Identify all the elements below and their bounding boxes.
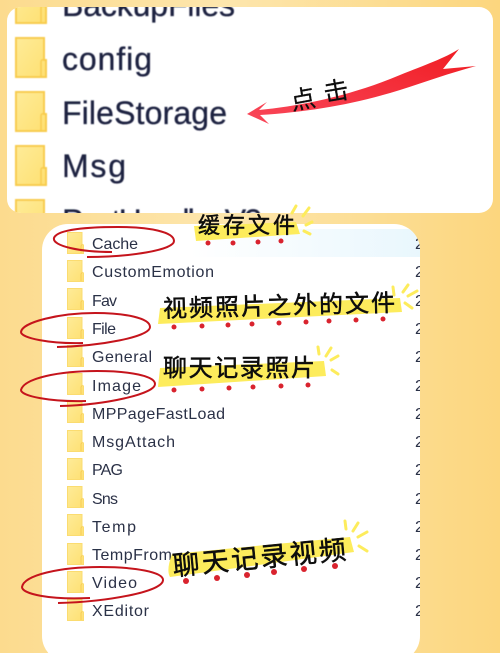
lower folder rows: MPPageFastLoad [92,406,225,423]
lower folder rows: 2 [415,349,424,366]
callout: cache files: 缓存文件 [198,208,295,240]
lower folder rows: 2 [415,434,424,451]
lower folder rows: 2 [415,491,424,508]
lower folder rows: PAG [92,462,123,479]
lower folder rows: 2 [415,547,424,564]
panel: top file list [7,7,493,213]
lower folder rows: XEditor [92,603,150,620]
lower folder rows: 2 [415,378,424,395]
lower folder rows: 2 [415,603,424,620]
lower folder rows: 2 [415,264,424,281]
lower folder rows: Image [92,378,141,395]
circle: Video [22,567,163,603]
lower folder rows: Cache [92,236,138,253]
lower folder rows: TempFrom [92,547,172,564]
callout: chat record videos: 聊天记录视频 [171,528,348,583]
callout: cache files [194,206,312,246]
lower folder rows: Sns [92,491,118,508]
lower folder rows: Fav [92,293,117,310]
panel: lower folder list [42,224,424,653]
label: click [287,70,351,118]
circle: Cache [54,227,174,257]
lower folder rows: General [92,349,152,366]
lower folder rows: 2 [415,321,424,338]
top folder rows: Msg [62,148,126,184]
top folder rows [14,7,261,213]
top folder rows: FileStorage [62,95,227,131]
lower folder rows: 2 [415,575,424,592]
lower folder rows: 2 [415,236,424,253]
top folder rows: PostHandler V3 [62,203,262,239]
lower folder rows: 2 [415,293,424,310]
lower folder rows: File [92,321,116,338]
arrow: pointing to FileStorage [247,49,476,124]
circle: Image [21,371,155,406]
lower folder rows: Temp [92,519,136,536]
label: click: 击 [320,70,351,110]
circle: File [21,313,150,347]
lower folder rows: 2 [415,462,424,479]
lower folder rows: 2 [415,519,424,536]
lower folder rows: CustomEmotion [92,264,214,281]
callout: files other than video and photos: 视频照片之外的文件 [163,283,395,324]
lower folder rows: Video [92,575,137,592]
top folder rows: config [62,41,152,77]
callout: chat record photos [158,347,338,392]
callout: chat record photos: 聊天记录照片 [163,348,315,383]
lower folder rows: MsgAttach [92,434,175,451]
lower folder rows: 2 [415,406,424,423]
lower folder rows [68,232,424,620]
label: click: 点 [287,78,318,118]
